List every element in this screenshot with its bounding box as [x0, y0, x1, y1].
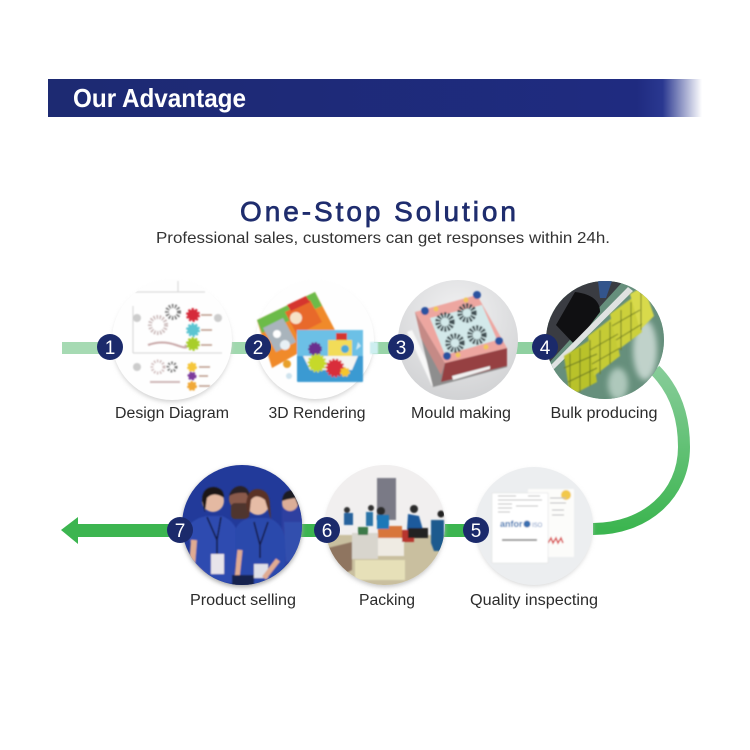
label: Packing: [359, 592, 415, 609]
toy cards illustration: [257, 292, 378, 382]
number badge 1: [97, 334, 123, 360]
number badge 7: [167, 517, 193, 543]
number badge 4: [532, 334, 558, 360]
step 5: quality inspecting: [463, 467, 598, 609]
step 1: design diagram: [97, 280, 232, 422]
step 2: 3D rendering: [245, 281, 378, 422]
certificate illustration: anfor: [500, 519, 523, 529]
number badge 6: 6: [322, 521, 332, 542]
diagram illustration: [133, 281, 222, 390]
arrow: exit to the left: [61, 517, 182, 544]
label: Design Diagram: [115, 405, 229, 422]
title: One-Stop Solution: [240, 196, 516, 227]
label: Mould making: [411, 405, 511, 422]
label: Product selling: [190, 592, 296, 609]
label: Bulk producing: [550, 405, 658, 422]
subtitle: Professional sales, customers can get responses within 24h.: [156, 230, 610, 247]
warehouse photo: [328, 477, 445, 585]
number badge 1: 1: [105, 338, 115, 359]
number badge 2: 2: [253, 338, 263, 359]
team photo: [184, 486, 304, 587]
number badge 7: 7: [175, 521, 185, 542]
label: 3D Rendering: [268, 405, 366, 422]
header banner: [48, 79, 702, 117]
step 7: product selling: [167, 465, 304, 609]
number badge 5: 5: [471, 521, 481, 542]
certificate illustration: [492, 489, 574, 563]
number badge 3: [388, 334, 414, 360]
mould illustration: [407, 291, 507, 387]
number badge 4: 4: [540, 338, 551, 359]
step 3: mould making: [388, 280, 518, 422]
number badge 2: [245, 334, 271, 360]
number badge 3: 3: [396, 338, 406, 359]
banner heading: Our Advantage: [73, 83, 246, 113]
certificate illustration: ISO: [532, 523, 543, 529]
number badge 5: [463, 517, 489, 543]
step 4: bulk producing: [532, 278, 665, 422]
label: Quality inspecting: [470, 592, 598, 609]
step 6: packing: [314, 465, 450, 609]
factory photo: [546, 281, 664, 399]
number badge 6: [314, 517, 340, 543]
process flow line: [62, 342, 684, 537]
